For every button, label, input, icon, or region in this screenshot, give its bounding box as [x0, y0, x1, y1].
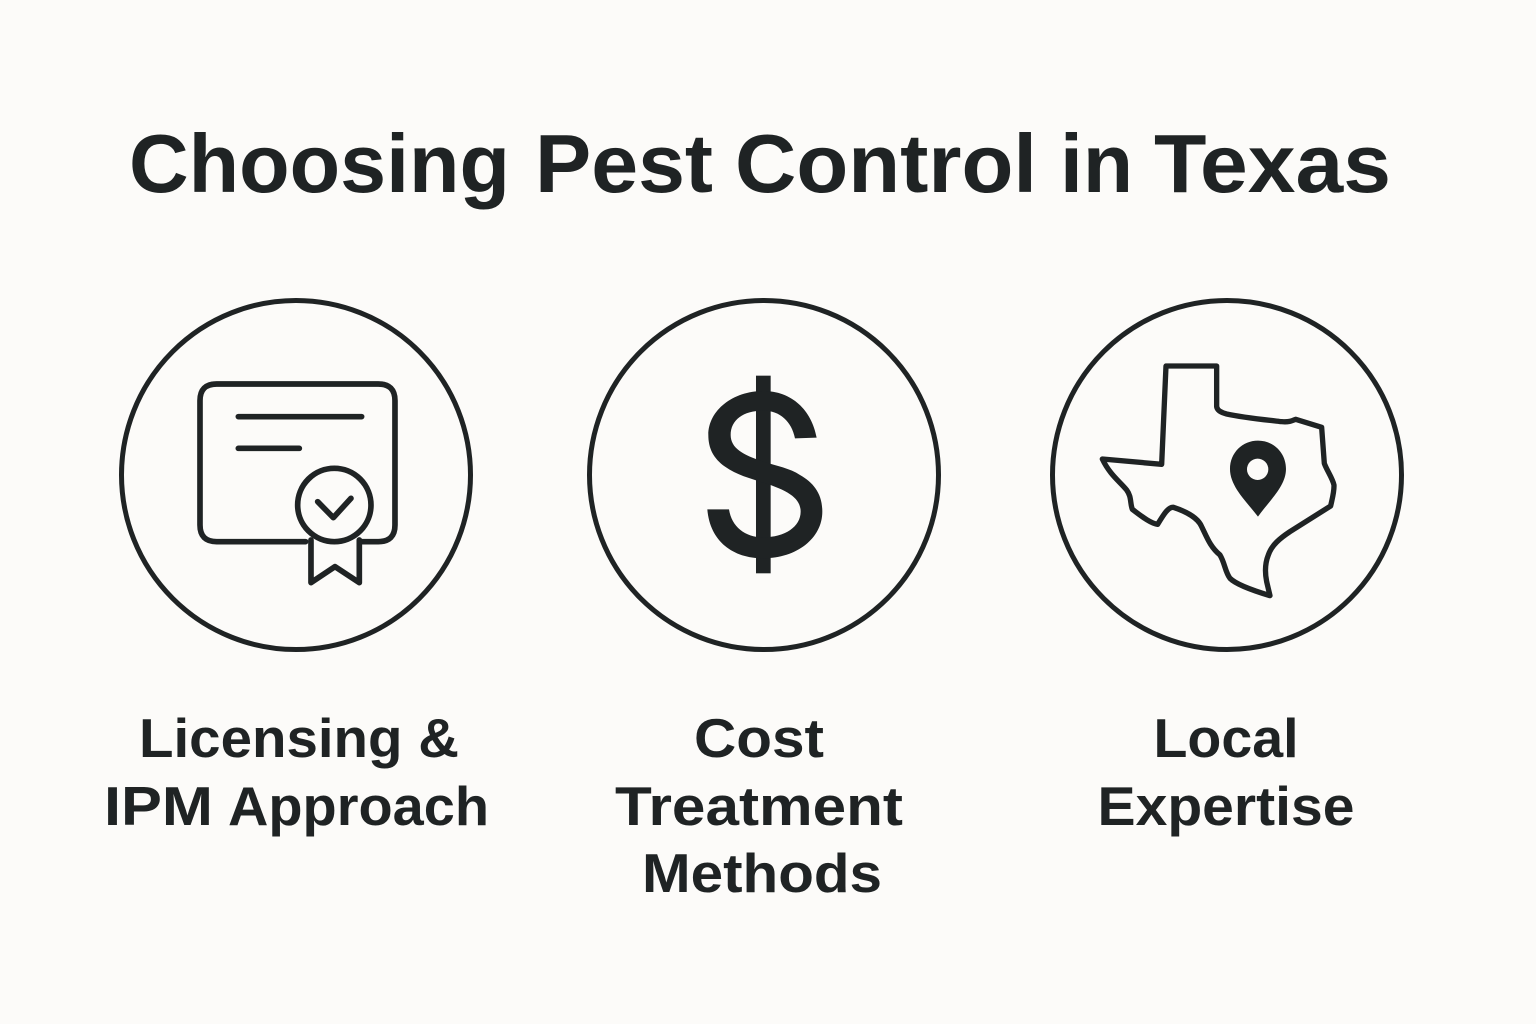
title: Texas [1154, 117, 1391, 210]
label: cost: Methods [642, 842, 882, 904]
label: licensing: Licensing & [139, 707, 459, 769]
title: in [1060, 117, 1133, 210]
icon: certificate [200, 384, 395, 583]
icon: dollar sign [707, 376, 822, 573]
title: Control [735, 117, 1037, 210]
title: Choosing [129, 117, 510, 210]
icon: texas map [1102, 366, 1334, 596]
circle: local [1052, 300, 1402, 650]
label: local: Expertise [1098, 775, 1354, 837]
title [129, 117, 1391, 210]
circle: licensing [122, 300, 470, 650]
label: cost [615, 707, 903, 904]
label: cost: Treatment [615, 775, 903, 837]
panel: cost [590, 300, 938, 904]
circle: cost [590, 300, 938, 650]
label: licensing: IPM [104, 775, 213, 837]
panel: local [1052, 300, 1402, 837]
icon: location pin [1230, 441, 1286, 517]
label: local [1098, 707, 1354, 837]
label: local: Local [1154, 707, 1298, 769]
title: Pest [535, 117, 713, 210]
panel: licensing [104, 300, 489, 837]
label: cost: Cost [694, 707, 824, 769]
label: licensing: Approach [228, 775, 489, 837]
label: licensing [104, 707, 489, 837]
